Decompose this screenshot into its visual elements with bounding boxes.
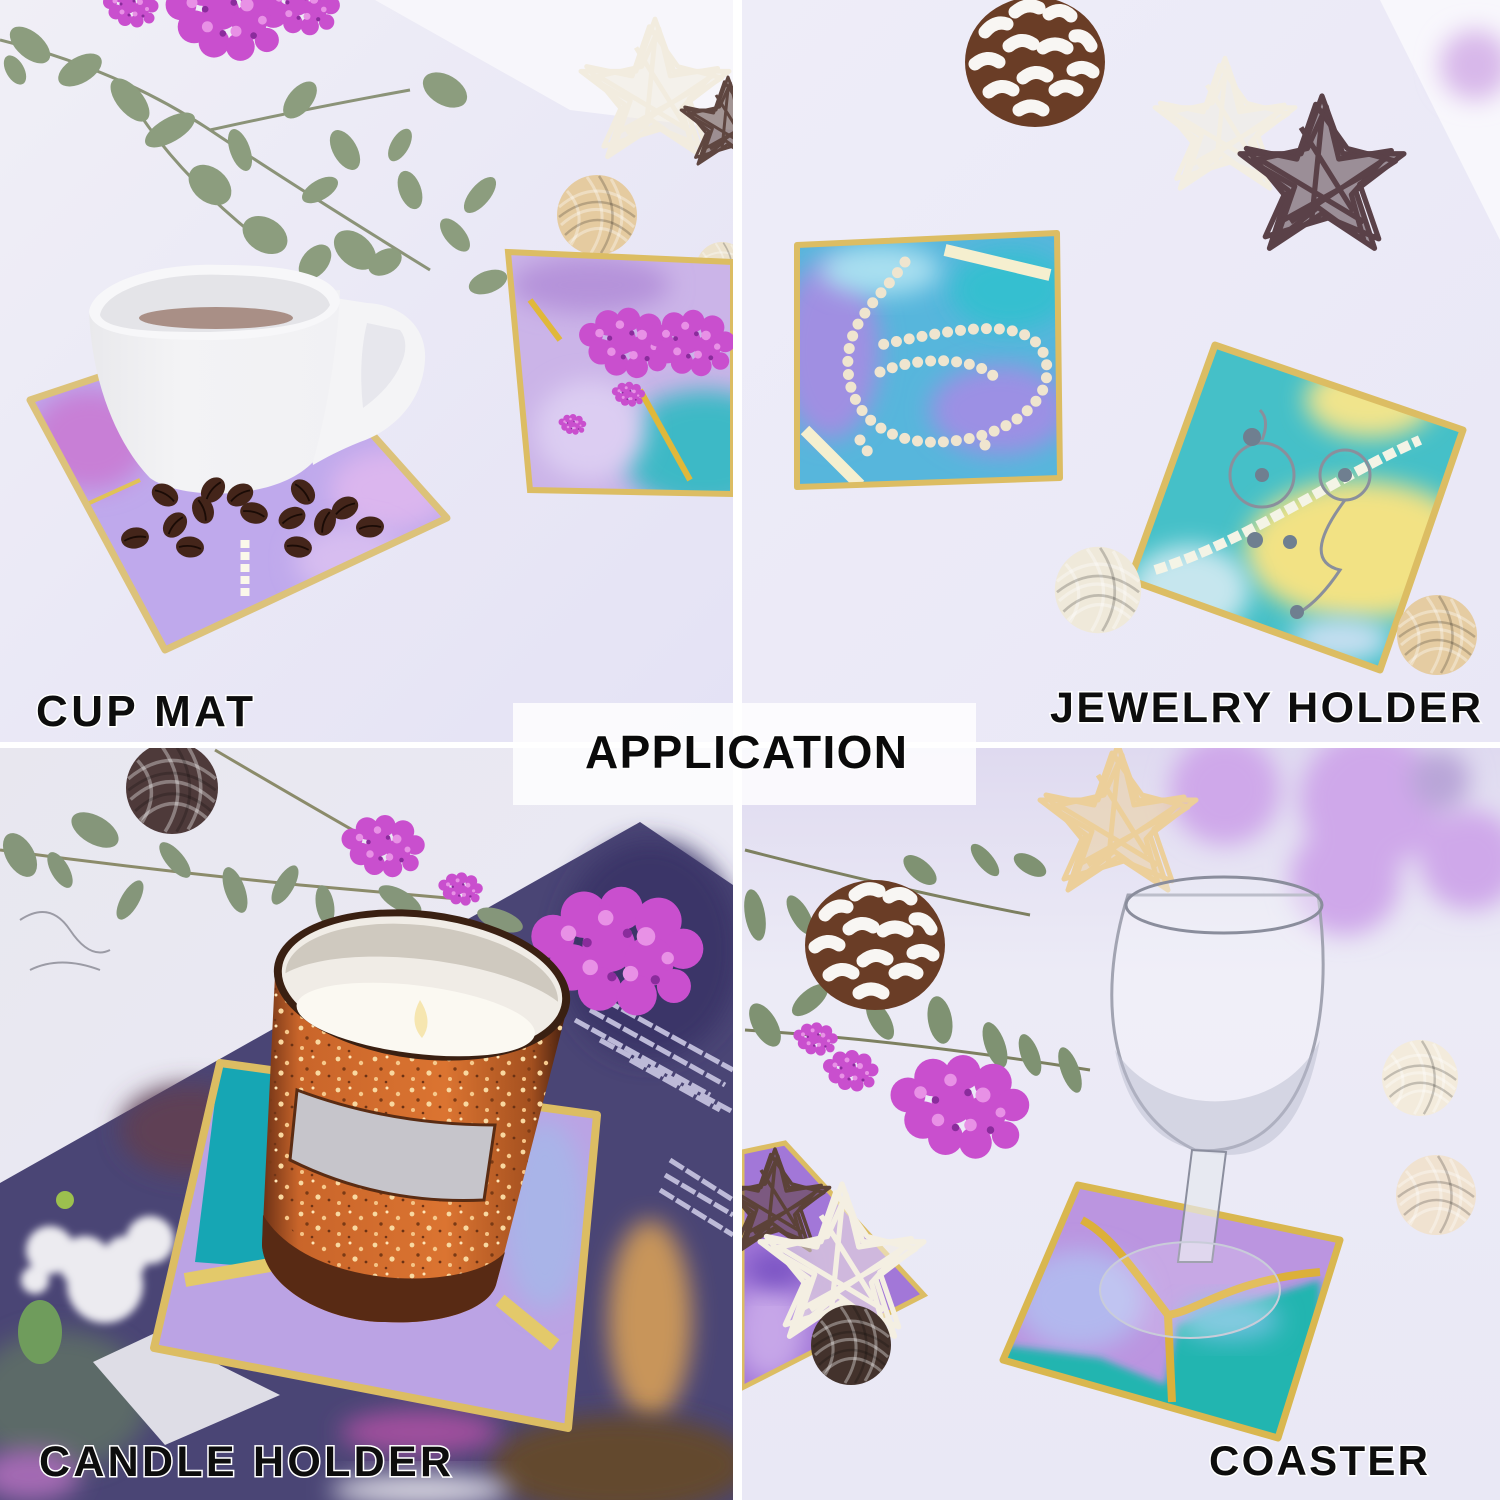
wine glass xyxy=(1100,877,1323,1338)
pine cone xyxy=(805,880,945,1010)
panel: coaster xyxy=(720,730,1500,1500)
panel: cup mat xyxy=(0,0,790,742)
earring coaster xyxy=(1125,340,1475,675)
earrings xyxy=(1230,410,1370,612)
label: jewelry holder: JEWELRY HOLDER xyxy=(1050,684,1481,732)
candle jar xyxy=(262,893,579,1322)
right rattan balls xyxy=(1382,1040,1476,1235)
eucalyptus and flowers xyxy=(0,750,703,1015)
title: APPLICATION xyxy=(585,726,907,778)
glass coaster xyxy=(1000,1180,1345,1445)
white card xyxy=(93,1333,280,1445)
panel: candle holder xyxy=(0,742,750,1500)
coffee cup xyxy=(89,265,425,494)
title banner xyxy=(513,703,976,805)
rattan ball xyxy=(557,175,637,255)
jewelry coaster with pearl necklace xyxy=(780,230,1070,490)
candle coaster xyxy=(150,1060,600,1445)
eucalyptus branches xyxy=(741,840,1090,1096)
coffee beans xyxy=(119,473,385,560)
magazine text lines xyxy=(575,1000,733,1235)
label: cup mat: CUP MAT xyxy=(36,687,253,736)
magazine xyxy=(0,822,750,1500)
white flower xyxy=(21,1216,174,1323)
pink flowers xyxy=(793,1022,1029,1159)
left purple coaster xyxy=(742,1140,928,1391)
pearls xyxy=(848,262,1047,458)
rattan balls xyxy=(1055,547,1477,675)
brown rattan ball xyxy=(126,742,218,834)
rattan star xyxy=(578,16,733,166)
purple flowers xyxy=(103,0,340,61)
candle label xyxy=(290,1090,495,1200)
gold rattan star xyxy=(1040,745,1196,890)
green leaves xyxy=(18,1191,74,1364)
rattan stars xyxy=(1155,58,1404,248)
purple resin coaster with flowers xyxy=(504,248,733,497)
cup mat coaster xyxy=(26,374,450,654)
panel: jewelry holder xyxy=(742,0,1500,742)
label: coaster: COASTER xyxy=(1209,1437,1428,1484)
handwriting on paper xyxy=(20,912,110,970)
blurred purple flowers xyxy=(1170,730,1500,935)
eucalyptus branch xyxy=(0,20,511,299)
label: candle holder: CANDLE HOLDER xyxy=(39,1438,451,1486)
pine cone xyxy=(965,0,1105,127)
